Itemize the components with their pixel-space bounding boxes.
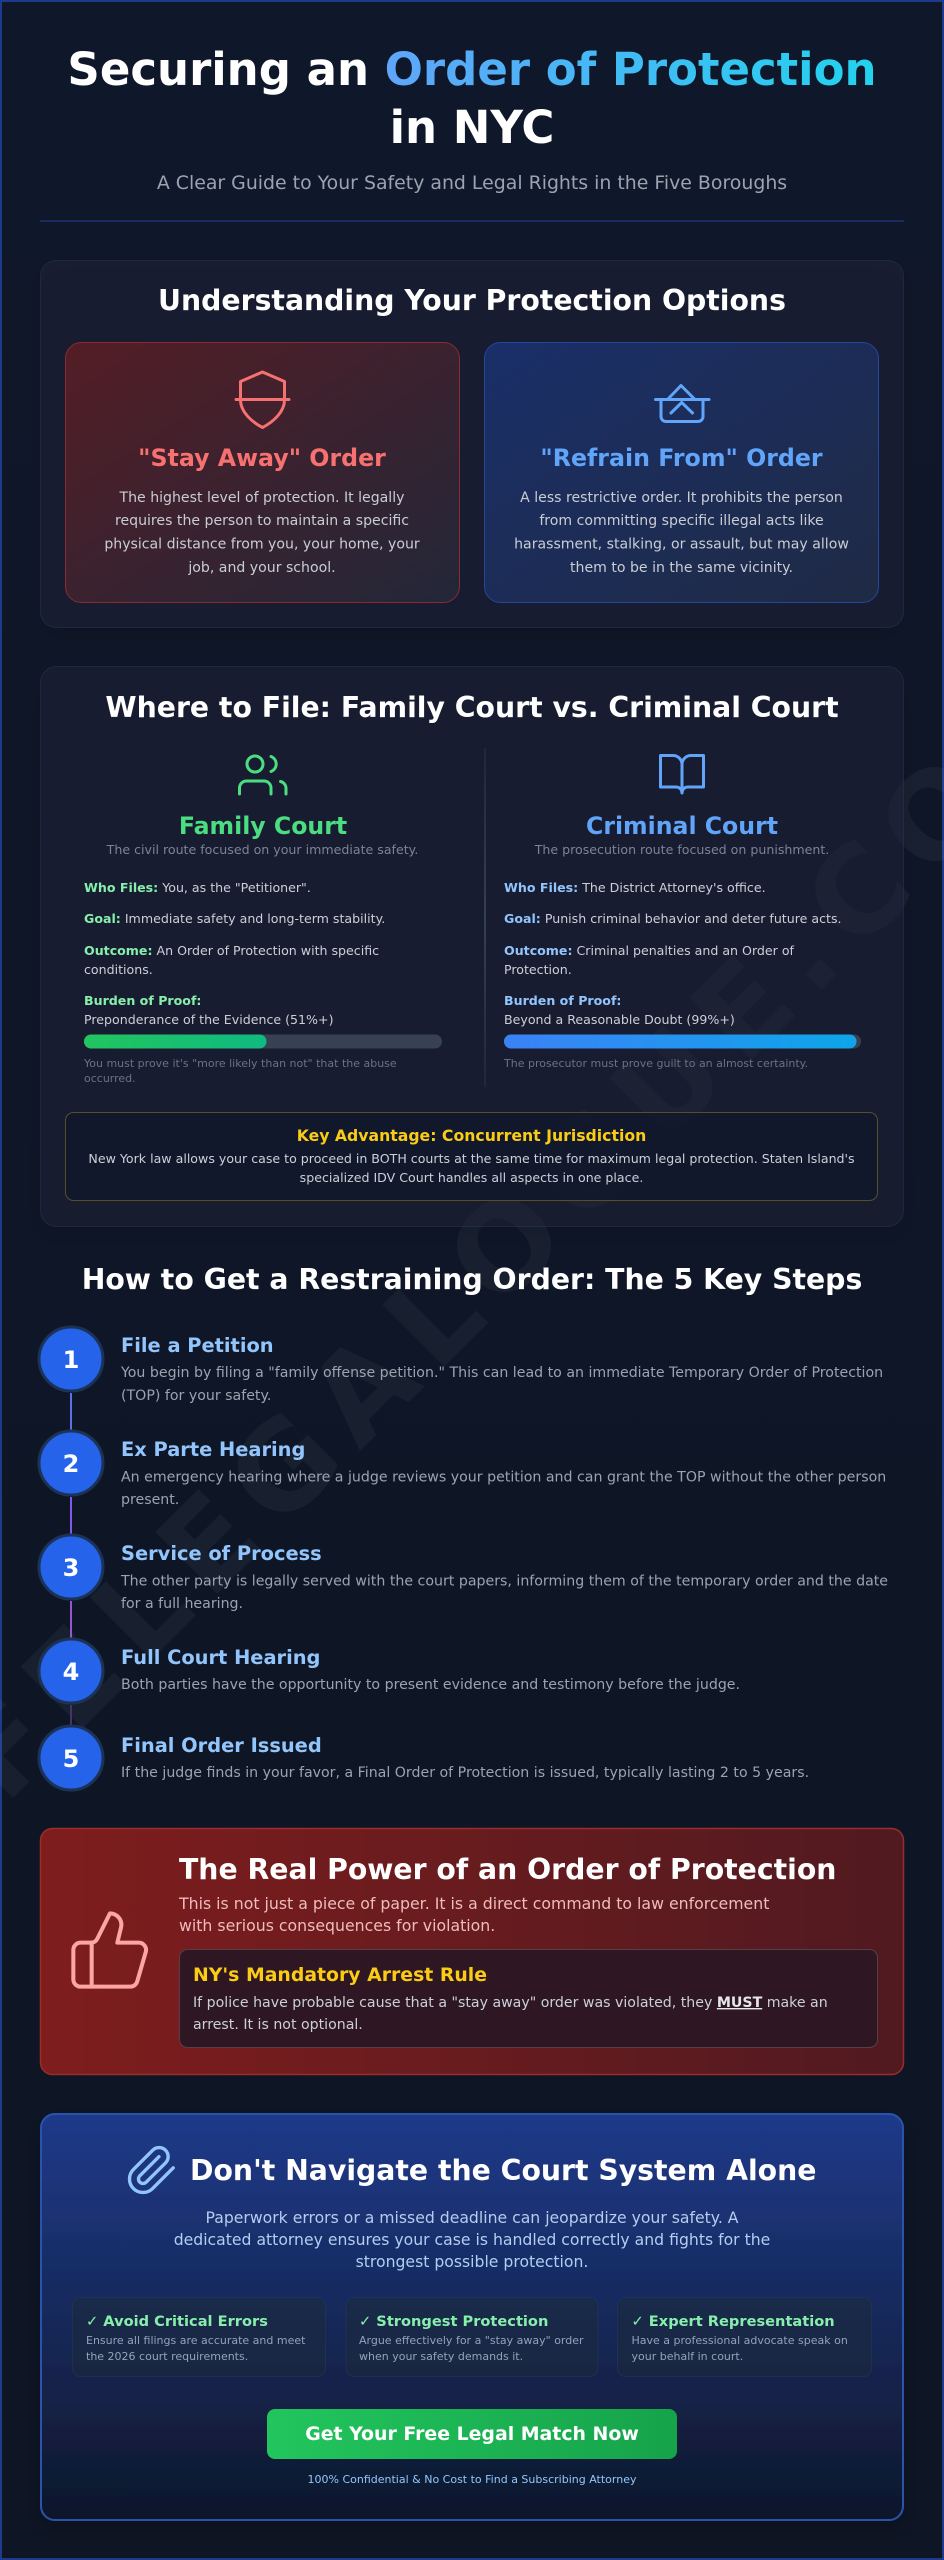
- benefit: avoid critical errors: Ensure all filings are accurate and meet: [86, 2334, 306, 2347]
- burden note: The prosecutor must prove guilt to an almost certainty.: [503, 1057, 808, 1070]
- card text: [104, 490, 420, 576]
- card text: harassment, stalking, or assault, but may allow: [514, 536, 849, 552]
- step 2: present.: [121, 1492, 179, 1508]
- benefit: avoid critical errors: the 2026 court requirements.: [86, 2350, 248, 2363]
- callout: concurrent jurisdiction: New York law allows your case to proceed in BOTH courts at the same time for maximum legal protection. Staten Island's: [88, 1151, 855, 1166]
- details: Burden of Proof:: [504, 993, 621, 1008]
- card text: A less restrictive order. It prohibits the person: [520, 490, 843, 506]
- card text: [514, 490, 849, 576]
- heading: five steps: How to Get a Restraining Order: The 5 Key Steps: [82, 1263, 862, 1296]
- details: Protection.: [504, 962, 572, 977]
- details: Preponderance of the Evidence (51%+): [84, 1012, 334, 1027]
- benefit: strongest protection: [346, 2298, 598, 2376]
- description: Paperwork errors or a missed deadline can jeopardize your safety. A: [206, 2208, 739, 2227]
- column: criminal court: [503, 755, 861, 1070]
- icon: thumbs up: [71, 1911, 148, 1989]
- column subtitle: The prosecution route focused on punishment.: [534, 842, 829, 857]
- burden note: [83, 1057, 397, 1085]
- card heading: "Refrain From" Order: [540, 444, 823, 472]
- column heading: Criminal Court: [586, 812, 778, 840]
- footnote: 100% Confidential & No Cost to Find a Subscribing Attorney: [308, 2473, 637, 2486]
- callout: mandatory arrest: [180, 1950, 878, 2048]
- card heading: "Stay Away" Order: [138, 444, 386, 472]
- callout: concurrent jurisdiction: specialized IDV Court handles all aspects in one place.: [300, 1170, 643, 1185]
- icon: shield: [236, 372, 289, 428]
- card text: requires the person to maintain a specific: [115, 513, 409, 529]
- benefit: strongest protection: Argue effectively for a "stay away" order: [359, 2334, 584, 2347]
- icon: basket: [656, 386, 709, 422]
- description: strongest possible protection.: [356, 2252, 588, 2271]
- icon: people: [240, 756, 286, 794]
- step 5: If the judge finds in your favor, a Final Order of Protection is issued, typically lasting 2 to 5 years.: [121, 1765, 809, 1781]
- heading: call to action: Don't Navigate the Court System Alone: [190, 2154, 816, 2187]
- step 3: [39, 1535, 888, 1612]
- step 1: (TOP) for your safety.: [121, 1388, 271, 1404]
- burden bar: [504, 1034, 861, 1048]
- step 3: The other party is legally served with the court papers, informing them of the temporary order and the date: [120, 1574, 888, 1590]
- step 4: [39, 1639, 740, 1703]
- step 4: Both parties have the opportunity to present evidence and testimony before the judge.: [121, 1677, 740, 1693]
- panel: real power: [40, 1828, 904, 2074]
- details: [84, 880, 385, 1027]
- step 1: File a Petition: [121, 1334, 274, 1357]
- step 3: for a full hearing.: [121, 1596, 243, 1612]
- benefit: expert representation: [618, 2298, 872, 2376]
- description: dedicated attorney ensures your case is handled correctly and fights for the: [174, 2230, 770, 2249]
- description: [174, 2208, 770, 2271]
- panel: protection options: [40, 260, 904, 628]
- button: [267, 2409, 677, 2459]
- details: Who Files: You, as the "Petitioner".: [84, 880, 311, 895]
- burden note: You must prove it's "more likely than not" that the abuse: [83, 1057, 397, 1070]
- steps timeline: [39, 1327, 888, 1790]
- step 1: You begin by filing a "family offense petition." This can lead to an immediate Temporary Order of Protection: [120, 1365, 883, 1381]
- step 1: 1: [63, 1346, 79, 1374]
- step 2: 2: [63, 1450, 79, 1478]
- icon: book: [660, 755, 704, 793]
- step 2: An emergency hearing where a judge reviews your petition and can grant the TOP without the other person: [121, 1470, 886, 1486]
- heading: where to file: Where to File: Family Court vs. Criminal Court: [105, 691, 839, 724]
- callout: concurrent jurisdiction: [66, 1112, 878, 1200]
- benefit: expert representation: ✓ Expert Representation: [632, 2313, 835, 2330]
- step 2: Ex Parte Hearing: [121, 1438, 305, 1461]
- card text: them to be in the same vicinity.: [570, 560, 793, 576]
- step 3: 3: [63, 1554, 79, 1582]
- callout: mandatory arrest: NY's Mandatory Arrest Rule: [193, 1965, 487, 1986]
- burden note: occurred.: [84, 1072, 136, 1085]
- panel: where to file: [40, 666, 904, 1226]
- description: [178, 1894, 769, 1935]
- step 5: Final Order Issued: [121, 1734, 322, 1757]
- card: refrain from order: [484, 342, 878, 602]
- step 4: Full Court Hearing: [121, 1646, 320, 1669]
- card text: job, and your school.: [187, 560, 336, 576]
- details: Outcome: Criminal penalties and an Order of: [504, 943, 795, 958]
- subtitle: A Clear Guide to Your Safety and Legal Rights in the Five Boroughs: [157, 172, 787, 194]
- callout: concurrent jurisdiction: Key Advantage: Concurrent Jurisdiction: [297, 1126, 646, 1145]
- card text: physical distance from you, your home, your: [104, 536, 420, 552]
- column heading: Family Court: [179, 812, 347, 840]
- heading: real power: The Real Power of an Order of Protection: [179, 1853, 836, 1886]
- burden bar: [84, 1034, 442, 1048]
- description: with serious consequences for violation.: [179, 1916, 495, 1935]
- column subtitle: The civil route focused on your immediate safety.: [106, 842, 418, 857]
- details: conditions.: [84, 962, 153, 977]
- benefit: strongest protection: when your safety demands it.: [359, 2350, 523, 2363]
- title: Securing an Order of Protection: [67, 43, 877, 96]
- card text: The highest level of protection. It legally: [119, 490, 404, 506]
- step 2: [39, 1431, 886, 1508]
- step 5: 5: [63, 1745, 79, 1773]
- step 1: [39, 1327, 883, 1404]
- details: Outcome: An Order of Protection with specific: [84, 943, 379, 958]
- step 5: [39, 1726, 809, 1790]
- benefit: avoid critical errors: [72, 2298, 326, 2376]
- card text: from committing specific illegal acts like: [539, 513, 824, 529]
- button: Get Your Free Legal Match Now: [305, 2423, 639, 2445]
- title line two: in NYC: [390, 101, 554, 154]
- benefit: strongest protection: ✓ Strongest Protection: [359, 2313, 548, 2330]
- details: Goal: Immediate safety and long-term stability.: [84, 911, 385, 926]
- step 3: Service of Process: [121, 1542, 322, 1565]
- details: Burden of Proof:: [84, 993, 201, 1008]
- benefit: expert representation: your behalf in court.: [632, 2350, 743, 2363]
- details: Beyond a Reasonable Doubt (99%+): [504, 1012, 735, 1027]
- step 4: 4: [63, 1658, 79, 1686]
- header: [67, 43, 877, 194]
- column: family court: [83, 756, 442, 1085]
- callout: mandatory arrest: If police have probable cause that a "stay away" order was violated, they MUST make an: [193, 1995, 828, 2011]
- benefit: expert representation: Have a professional advocate speak on: [632, 2334, 848, 2347]
- benefit: avoid critical errors: ✓ Avoid Critical Errors: [86, 2313, 268, 2330]
- details: [504, 880, 842, 1027]
- details: Goal: Punish criminal behavior and deter future acts.: [504, 911, 842, 926]
- panel: call to action: [41, 2114, 903, 2520]
- description: This is not just a piece of paper. It is a direct command to law enforcement: [178, 1894, 769, 1913]
- heading: protection options: Understanding Your Protection Options: [158, 284, 786, 317]
- callout: mandatory arrest: arrest. It is not optional.: [193, 2017, 363, 2033]
- details: Who Files: The District Attorney's office.: [504, 880, 766, 895]
- icon: paperclip: [128, 2146, 175, 2194]
- card: stay away order: [66, 342, 460, 602]
